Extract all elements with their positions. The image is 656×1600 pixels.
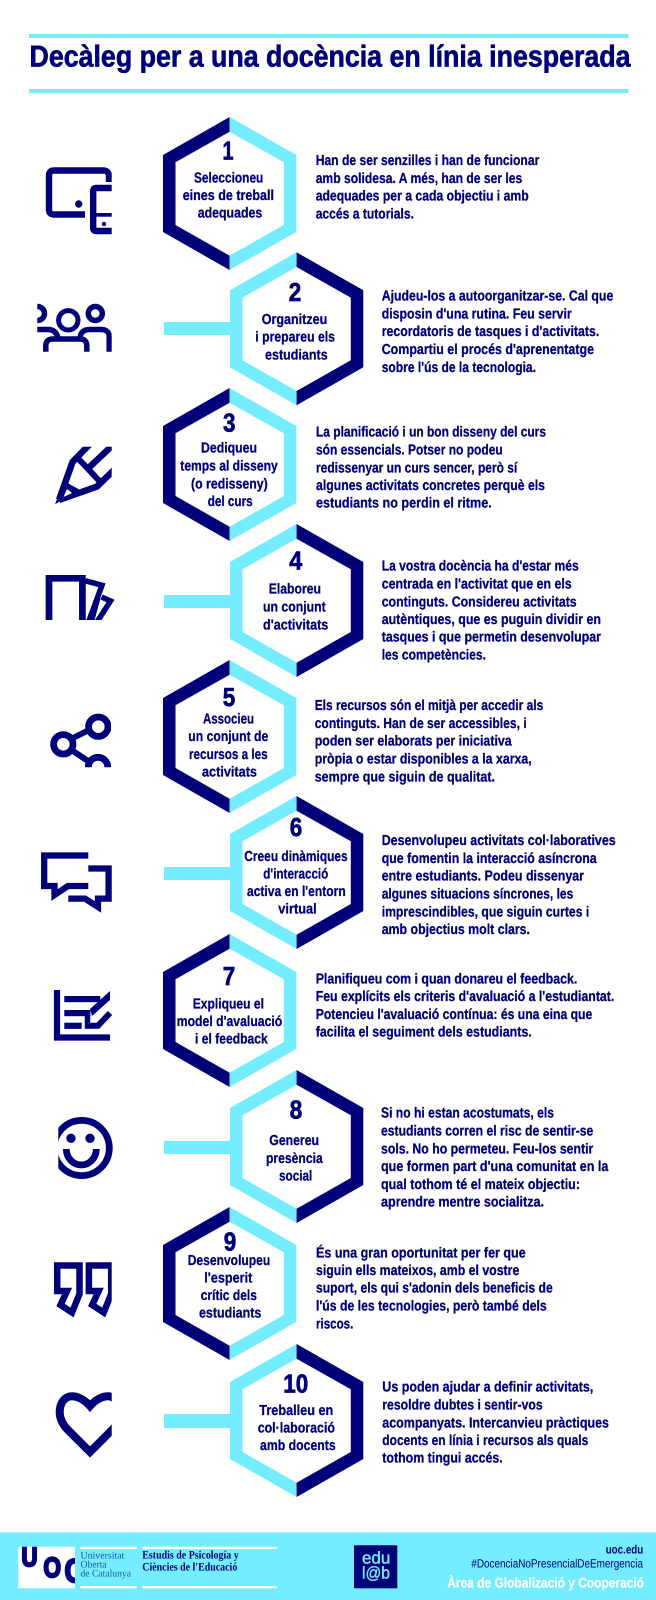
step 10 description: resoldre dubtes i sentir-vos xyxy=(382,1397,543,1413)
UOC logo: O xyxy=(44,1552,61,1583)
step 1 description: Han de ser senzilles i han de funcionar xyxy=(316,153,540,169)
step 9 description: riscos. xyxy=(316,1316,353,1332)
step 1 heading: adequades xyxy=(198,206,262,222)
number 9: 9 xyxy=(224,1227,236,1257)
step 4 description: continguts. Considereu activitats xyxy=(382,594,577,610)
icon: evaluation chart xyxy=(57,990,110,1038)
UOC logo: C xyxy=(64,1552,84,1589)
step 1 heading: eines de treball xyxy=(183,188,274,204)
icon: tablet and phone xyxy=(49,170,115,231)
step 9 description: siguin ells mateixos, amb el vostre xyxy=(316,1263,519,1279)
step 5 description: Els recursos són el mitjà per accedir als xyxy=(315,698,543,714)
connector 8 xyxy=(164,1141,231,1154)
step 10 description: docents en línia i recursos als quals xyxy=(382,1433,588,1449)
UOC logo xyxy=(18,1546,75,1588)
step 2 description: recordatoris de tasques i d'activitats. xyxy=(382,324,599,340)
step 8 heading: social xyxy=(279,1169,312,1185)
faculty name: Estudis de Psicología y xyxy=(142,1549,239,1561)
step 4 description: La vostra docència ha d'estar més xyxy=(382,559,579,575)
icon: smiley xyxy=(54,1120,109,1176)
step 3 description: algunes activitats concretes perquè els xyxy=(316,478,545,494)
step 5 description: pròpia o estar disponibles a la xarxa, xyxy=(315,751,532,767)
step 1 description xyxy=(316,153,540,222)
icon: share xyxy=(54,717,108,777)
step 4 heading: un conjunt xyxy=(263,600,326,616)
step 5 heading xyxy=(188,711,268,781)
step 9 heading: l'esperit xyxy=(204,1270,252,1286)
step 9 heading xyxy=(188,1253,270,1322)
step 7 heading xyxy=(177,996,282,1048)
step 3 description xyxy=(316,425,546,511)
university name: Oberta xyxy=(80,1559,107,1570)
step 10 description: Us poden ajudar a definir activitats, xyxy=(382,1380,593,1396)
step 4 description: tasques i que permetin desenvolupar xyxy=(382,630,601,646)
step 1 heading: Seleccioneu xyxy=(194,170,263,186)
step 2 description: sobre l'ús de la tecnologia. xyxy=(382,360,536,376)
step 3 heading: Dediqueu xyxy=(201,441,257,457)
step 7 description: Potencieu l'avaluació contínua: és una eina que xyxy=(316,1007,592,1023)
step 7 description xyxy=(316,971,614,1041)
step 3 heading xyxy=(180,441,278,510)
UOC logo: U xyxy=(22,1542,38,1572)
step 10 heading xyxy=(258,1403,336,1454)
number 8: 8 xyxy=(290,1094,302,1124)
step 10 description: tothom tingui accés. xyxy=(382,1451,503,1467)
step 2 description: Ajudeu-los a autoorganitzar-se. Cal que xyxy=(382,288,613,304)
step 3 description: són essencials. Potser no podeu xyxy=(316,442,503,458)
step 3 heading: (o redisseny) xyxy=(191,476,268,492)
step 7 xyxy=(57,934,614,1087)
number 4: 4 xyxy=(289,545,303,575)
edulab logo: l@b xyxy=(362,1563,390,1582)
hexagon 1 xyxy=(163,117,296,270)
step 6 heading: Creeu dinàmiques xyxy=(244,849,348,865)
number 3: 3 xyxy=(223,408,236,438)
step 2 xyxy=(30,252,613,405)
step 8 description: estudiants corren el risc de sentir-se xyxy=(381,1123,593,1139)
step 6 heading: virtual xyxy=(278,902,317,918)
step 8 description: qual tothom té el mateix objectiu: xyxy=(381,1177,580,1193)
step 6 heading: activa en l'entorn xyxy=(247,884,346,900)
step 5 description: sempre que siguin de qualitat. xyxy=(315,769,495,785)
step 9 heading: crític dels xyxy=(201,1288,257,1304)
step 2 description: Compartiu el procés d'aprenentatge xyxy=(382,342,594,358)
icon: heart xyxy=(60,1396,120,1452)
step 4 heading: d'activitats xyxy=(263,617,328,633)
step 6 description: que fomentin la interacció asíncrona xyxy=(382,851,597,867)
number 7: 7 xyxy=(223,961,235,991)
step 8 description: Si no hi estan acostumats, els xyxy=(381,1106,554,1122)
step 7 description: facilita el seguiment dels estudiants. xyxy=(316,1025,532,1041)
step 10 heading: amb docents xyxy=(260,1438,336,1454)
step 9 description xyxy=(316,1244,553,1332)
step 2 heading: Organitzeu xyxy=(262,312,327,328)
step 4 heading xyxy=(263,581,328,633)
icon: documents xyxy=(49,578,110,622)
step 8 heading: presència xyxy=(266,1151,323,1167)
step 4 description: les competències. xyxy=(382,648,486,664)
step 9 heading: Desenvolupeu xyxy=(188,1253,270,1269)
step 9 xyxy=(57,1207,553,1360)
step 9 description: És una gran oportunitat per fer que xyxy=(316,1244,526,1261)
faculty name xyxy=(142,1547,277,1588)
connector 10 xyxy=(164,1414,231,1428)
hexagon 2 xyxy=(230,252,363,405)
step 8 description xyxy=(381,1106,609,1211)
step 7 heading: i el feedback xyxy=(195,1032,268,1048)
hexagon 6 xyxy=(230,796,363,949)
step 6 description xyxy=(382,833,616,938)
step 1 description: adequades per a cada objectiu i amb xyxy=(316,189,529,205)
step 10 description: acompanyats. Intercanvieu pràctiques xyxy=(382,1415,609,1431)
step 8 description: aprendre mentre socialitza. xyxy=(381,1195,544,1211)
number 1: 1 xyxy=(222,135,234,165)
connector 6 xyxy=(164,867,231,880)
step 2 heading xyxy=(255,312,335,363)
step 1 xyxy=(49,117,540,270)
step 5 description: continguts. Han de ser accessibles, i xyxy=(315,716,527,732)
hexagon 5 xyxy=(163,660,296,813)
header xyxy=(29,34,631,93)
step 8 description: sols. No ho permeteu. Feu-los sentir xyxy=(381,1141,594,1157)
number 6: 6 xyxy=(290,812,302,842)
step 10 xyxy=(60,1344,609,1497)
step 2 description xyxy=(382,288,613,376)
icon: speech bubbles xyxy=(44,856,109,907)
step 3 heading: del curs xyxy=(208,494,253,510)
step 4 description xyxy=(382,559,601,664)
hexagon 7 xyxy=(163,934,296,1087)
step 9 heading: estudiants xyxy=(199,1306,261,1322)
step 5 heading: Associeu xyxy=(203,711,254,727)
step 6 heading xyxy=(244,849,348,918)
step 6 description: amb objectius molt clars. xyxy=(382,922,530,938)
step 4 description: autèntiques, que es puguin dividir en xyxy=(382,612,601,628)
icon: people xyxy=(30,306,109,352)
step 5 description: poden ser elaborats per iniciativa xyxy=(315,734,512,750)
university name: de Catalunya xyxy=(80,1568,132,1579)
university name xyxy=(80,1547,137,1588)
number 10: 10 xyxy=(283,1369,308,1399)
step 1 description: amb solidesa. A més, han de ser les xyxy=(316,171,522,187)
step 1 description: accés a tutorials. xyxy=(316,206,414,222)
step 3 description: estudiants no perdin el ritme. xyxy=(316,495,492,511)
step 9 description: l'ús de les tecnologies, però també dels xyxy=(316,1299,547,1315)
step 6 description: entre estudiants. Podeu dissenyar xyxy=(382,869,584,885)
step 10 heading: col·laboració xyxy=(258,1421,335,1437)
step 4 xyxy=(49,524,601,677)
hexagon 8 xyxy=(230,1070,363,1223)
number 5: 5 xyxy=(223,682,235,712)
step 10 description xyxy=(382,1380,609,1467)
faculty name: Ciències de l'Educació xyxy=(142,1562,238,1574)
hexagon 4 xyxy=(230,524,363,677)
step 2 heading: i prepareu els xyxy=(255,330,335,346)
step 8 description: que formen part d'una comunitat en la xyxy=(381,1159,609,1175)
number 2: 2 xyxy=(289,277,301,307)
hexagon 9 xyxy=(163,1207,296,1360)
step 8 heading: Genereu xyxy=(269,1133,319,1149)
footer xyxy=(0,1532,656,1600)
connector 2 xyxy=(164,322,231,335)
edulab logo xyxy=(354,1545,397,1588)
step 5 heading: activitats xyxy=(202,765,257,781)
edulab logo: edu xyxy=(362,1548,390,1567)
step 5 heading: recursos a les xyxy=(189,747,268,763)
hexagon 10 xyxy=(230,1344,363,1497)
step 2 description: disposin d'una rutina. Feu servir xyxy=(382,306,572,322)
step 2 heading: estudiants xyxy=(265,347,328,363)
step 1 heading xyxy=(183,170,274,222)
step 5 description xyxy=(315,698,543,785)
step 7 heading: model d'avaluació xyxy=(177,1014,282,1030)
step 8 xyxy=(54,1070,609,1223)
step 7 heading: Expliqueu el xyxy=(193,996,264,1012)
step 8 heading xyxy=(266,1133,323,1185)
step 5 heading: un conjunt de xyxy=(188,729,268,745)
hexagon 3 xyxy=(163,388,296,541)
step 6 description: algunes situacions síncrones, les xyxy=(382,887,573,903)
step 9 description: suport, els qui s'adonin dels beneficis de xyxy=(316,1281,553,1297)
step 10 heading: Treballeu en xyxy=(259,1403,333,1419)
icon: pencil xyxy=(55,446,112,504)
step 4 description: centrada en l'activitat que en els xyxy=(382,576,572,592)
step 3 heading: temps al disseny xyxy=(180,459,278,475)
step 3 description: redissenyar un curs sencer, però sí xyxy=(316,460,518,476)
step 5 xyxy=(54,660,543,813)
step 3 xyxy=(55,388,546,541)
step 6 heading: d'interacció xyxy=(263,867,328,883)
step 6 description: Desenvolupeu activitats col·laboratives xyxy=(382,833,616,849)
step 6 description: imprescindibles, que siguin curtes i xyxy=(382,904,589,920)
website: uoc.edu xyxy=(606,1542,643,1556)
icon: quotation marks xyxy=(57,1266,111,1312)
step 3 description: La planificació i un bon disseny del curs xyxy=(316,425,546,441)
connector 4 xyxy=(164,595,231,608)
step 7 description: Planifiqueu com i quan donareu el feedback. xyxy=(316,971,577,987)
step 4 heading: Elaboreu xyxy=(269,581,321,597)
university name: Universitat xyxy=(80,1550,125,1561)
step 6 xyxy=(44,796,616,949)
